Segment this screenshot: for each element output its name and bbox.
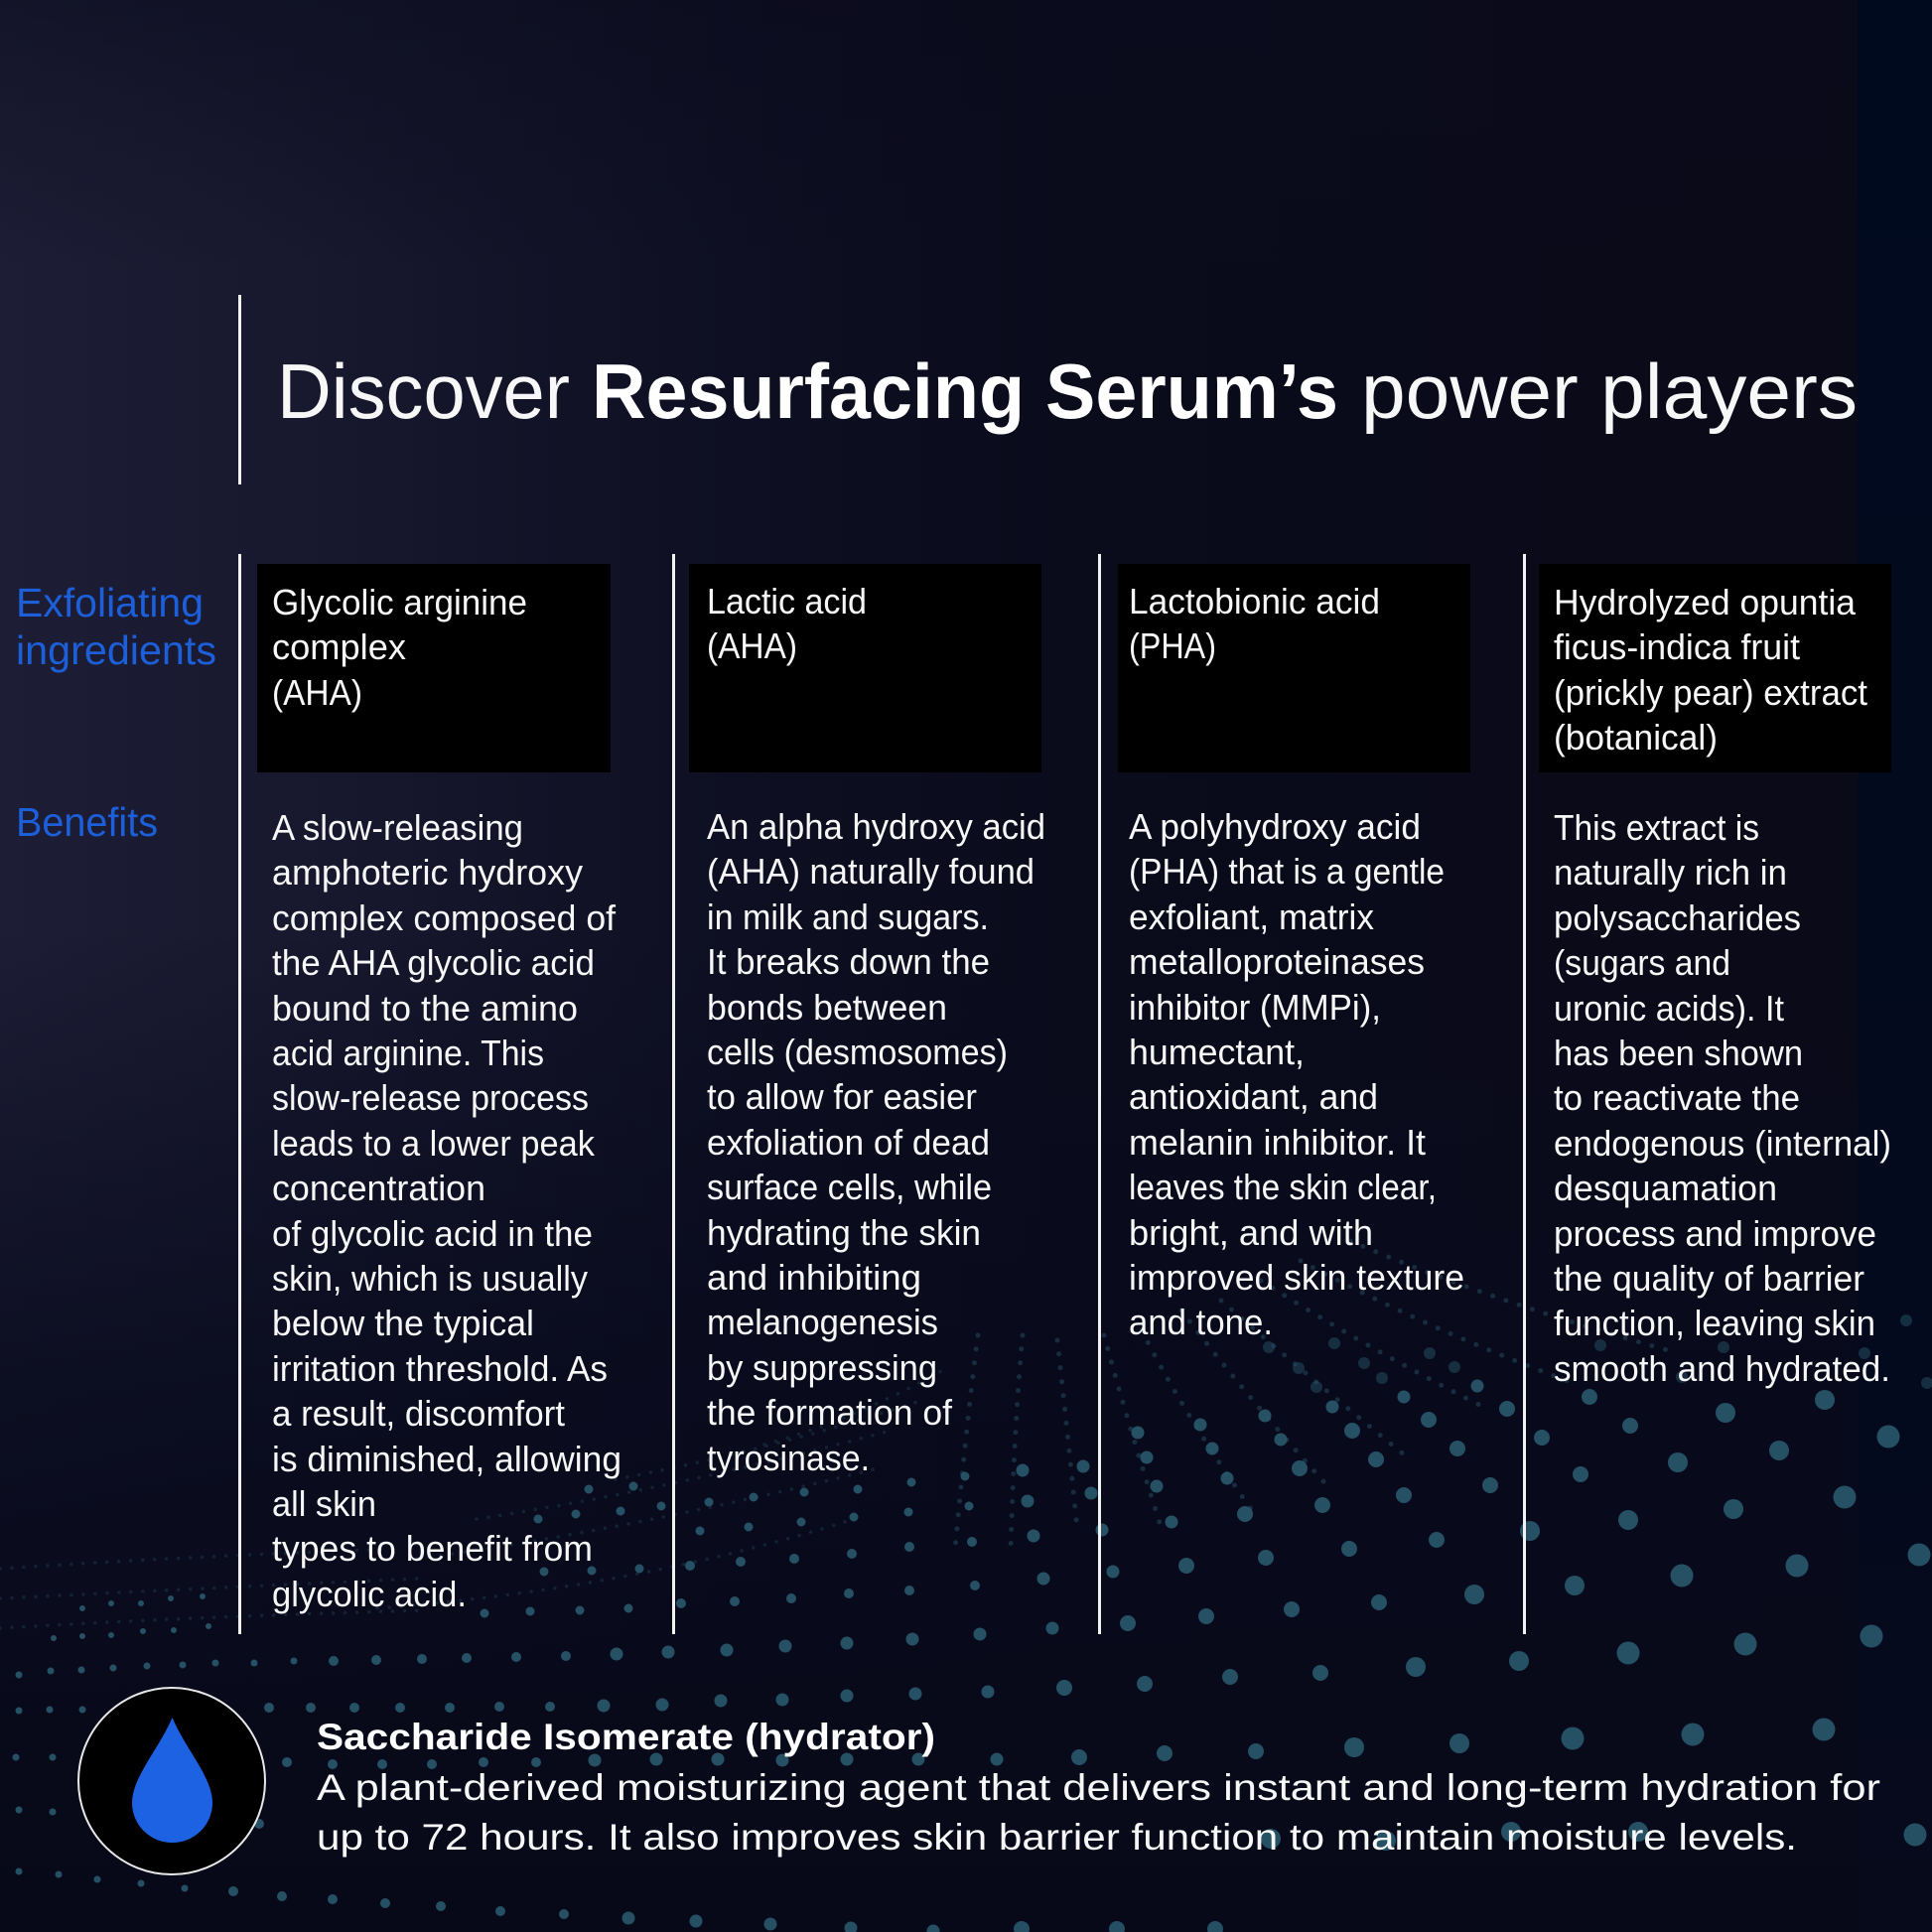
benefits text: leads to a lower peak [272,1123,596,1164]
benefits text: below the typical [272,1303,534,1343]
benefits text: bright, and with [1129,1212,1373,1253]
benefits text: (AHA) naturally found [707,851,1035,892]
ingredient header [689,564,1041,772]
benefits text: humectant, [1129,1032,1305,1072]
benefits text: (sugars and [1554,942,1730,983]
benefits text: leaves the skin clear, [1129,1167,1437,1207]
benefits text: naturally rich in [1554,852,1787,893]
benefits text [1129,806,1464,1342]
callout: saccharide isomerate: A plant-derived moisturizing agent that delivers instant and long-term hydration for [317,1767,1880,1808]
ingredient header: Lactic acid [707,581,867,621]
benefits text: to allow for easier [707,1076,977,1117]
column dividers [238,554,1526,1634]
benefits text: bonds between [707,987,947,1028]
benefits text: (PHA) that is a gentle [1129,851,1445,892]
benefits text: the formation of [707,1392,953,1433]
row label: benefits: Benefits [16,799,158,845]
benefits text: in milk and sugars. [707,897,989,937]
callout: saccharide isomerate [317,1717,1880,1858]
benefits text: and inhibiting [707,1257,921,1298]
ingredient header: (PHA) [1129,625,1216,666]
benefits text: A polyhydroxy acid [1129,806,1421,847]
benefits text: bound to the amino [272,988,578,1029]
callout: saccharide isomerate: Saccharide Isomerate (hydrator) [317,1717,935,1757]
benefits text: hydrating the skin [707,1212,981,1253]
benefits text: It breaks down the [707,941,990,982]
benefits text: This extract is [1554,807,1759,848]
benefits text: all skin [272,1483,376,1524]
benefits text: metalloproteinases [1129,941,1425,982]
benefits text: amphoteric hydroxy [272,852,583,893]
benefits text: An alpha hydroxy acid [707,806,1045,847]
benefits text: improved skin texture [1129,1257,1464,1298]
title: power players [1361,347,1858,435]
benefits text: by suppressing [707,1347,937,1388]
ingredient header: complex [272,626,406,667]
row label: exfoliating ingredients: Exfoliating [16,580,204,625]
ingredient header: (AHA) [272,672,362,713]
benefits text: melanin inhibitor. It [1129,1122,1426,1163]
panel: lactic acid [689,564,1045,1478]
ingredient header [1539,564,1891,772]
benefits text: tyrosinase. [707,1438,870,1478]
benefits text: surface cells, while [707,1167,992,1207]
benefits text: complex composed of [272,897,617,938]
benefits text: of glycolic acid in the [272,1213,593,1254]
dotted wave background [0,1241,1927,1931]
benefits text: glycolic acid. [272,1574,467,1614]
benefits text: and tone. [1129,1302,1273,1342]
ingredient header [1118,564,1470,772]
benefits text: inhibitor (MMPi), [1129,987,1381,1028]
benefits text: melanogenesis [707,1302,938,1342]
ingredient header: (prickly pear) extract [1554,672,1867,713]
benefits text: skin, which is usually [272,1258,588,1299]
ingredient header: Glycolic arginine [272,582,527,622]
benefits text: polysaccharides [1554,897,1801,938]
title [277,347,1858,435]
benefits text: smooth and hydrated. [1554,1348,1890,1389]
benefits text [272,807,621,1614]
callout: saccharide isomerate: up to 72 hours. It also improves skin barrier function to maintain moisture levels. [317,1817,1797,1858]
benefits text: has been shown [1554,1033,1803,1073]
benefits text: a result, discomfort [272,1393,565,1434]
panel: hydrolyzed opuntia ficus-indica fruit extract [1539,564,1891,1389]
benefits text: acid arginine. This [272,1033,544,1073]
divider: title rule [238,295,241,484]
benefits text: the quality of barrier [1554,1258,1864,1299]
benefits text [707,806,1045,1478]
benefits text: uronic acids). It [1554,988,1784,1029]
title: Discover [277,347,570,435]
benefits text: is diminished, allowing [272,1439,621,1479]
benefits text: concentration [272,1168,485,1208]
benefits text: to reactivate the [1554,1077,1800,1118]
title: Resurfacing Serum’s [592,347,1338,435]
benefits text: the AHA glycolic acid [272,942,595,983]
ingredient header: (AHA) [707,625,797,666]
benefits text: antioxidant, and [1129,1076,1378,1117]
ingredient header [257,564,611,772]
benefits text: cells (desmosomes) [707,1032,1008,1072]
row label: exfoliating ingredients: ingredients [16,627,216,673]
ingredient header: (botanical) [1554,717,1718,758]
ingredient header: Lactobionic acid [1129,581,1380,621]
icon: water drop in circle [78,1688,265,1874]
panel: lactobionic acid [1118,564,1470,1342]
benefits text: types to benefit from [272,1528,593,1569]
panel: glycolic arginine complex [257,564,621,1614]
benefits text: function, leaving skin [1554,1303,1875,1343]
benefits text: desquamation [1554,1168,1777,1208]
benefits text: process and improve [1554,1213,1876,1254]
benefits text: slow-release process [272,1077,589,1118]
benefits text: irritation threshold. As [272,1348,608,1389]
row label: exfoliating ingredients [16,580,216,673]
benefits text: A slow-releasing [272,807,523,848]
benefits text: endogenous (internal) [1554,1123,1891,1164]
ingredient header: ficus-indica fruit [1554,626,1800,667]
benefits text: exfoliant, matrix [1129,897,1374,937]
benefits text [1554,807,1891,1389]
ingredient header: Hydrolyzed opuntia [1554,582,1857,622]
benefits text: exfoliation of dead [707,1122,990,1163]
